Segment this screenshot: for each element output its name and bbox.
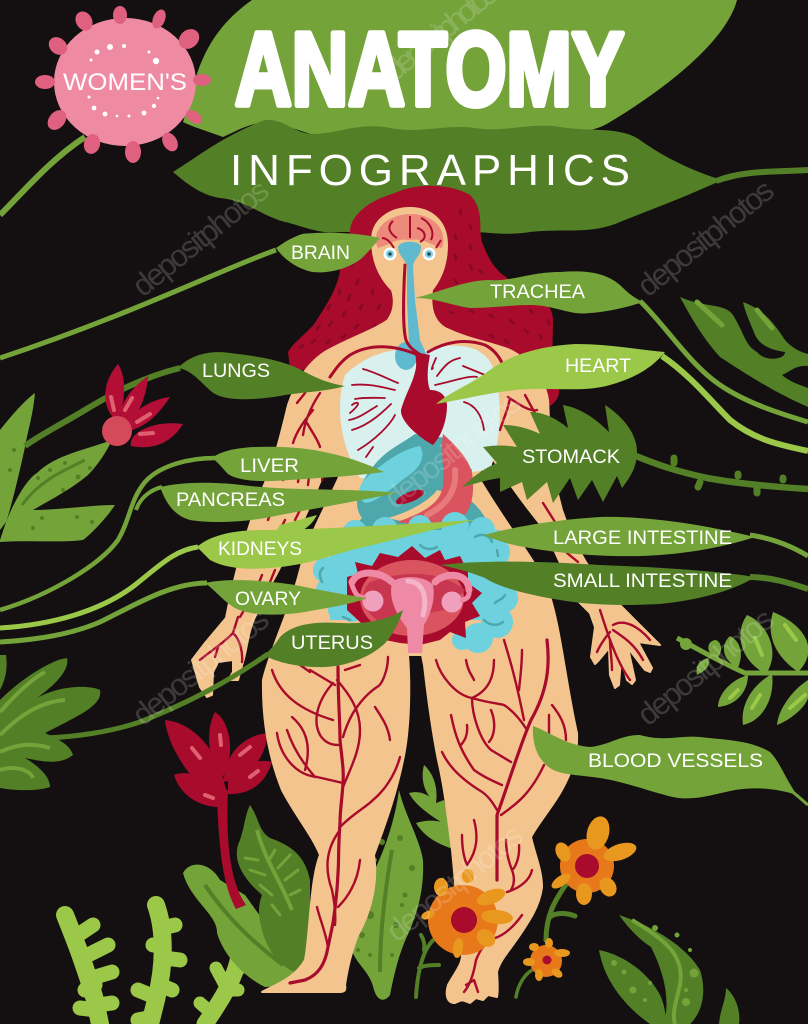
lungs: [340, 346, 500, 480]
watermark: depositphotos: [630, 601, 781, 732]
label leaf: kidneys: KIDNEYS: [218, 539, 302, 560]
plant: left spotted leaves: [0, 393, 115, 542]
watermark: depositphotos: [125, 172, 276, 303]
label leaf: brain: [0, 233, 380, 358]
badge: women's flower: [35, 6, 211, 163]
title: Anatomy: ANATOMY: [235, 12, 624, 128]
label leaf: small intestine: [440, 562, 808, 605]
watermark: [125, 0, 781, 948]
label leaf: blood vessels: [533, 726, 808, 805]
label leaf: liver: [0, 447, 384, 610]
body: [192, 208, 660, 1003]
hair: [288, 186, 559, 408]
label leaf: heart: [436, 344, 808, 451]
plant: mid-green leaf: [183, 865, 310, 987]
watermark: depositphotos: [379, 817, 530, 948]
label leaf: stomack: STOMACK: [522, 447, 620, 468]
flower: small orange with stem: [516, 938, 570, 997]
label leaf: small intestine: SMALL INTESTINE: [553, 571, 732, 592]
heart and arteries: [330, 265, 503, 457]
subtitle: Infographics: INFOGRAPHICS: [230, 146, 630, 195]
red flower: [102, 364, 183, 447]
plant: bottom right spotted leaves: [599, 915, 739, 1024]
label leaf: kidneys: [0, 515, 475, 628]
brain: [376, 214, 443, 248]
label leaf: trachea: TRACHEA: [490, 282, 585, 303]
plant: left bottom leaf: [0, 655, 100, 790]
flower: upper orange with stem: [546, 814, 639, 940]
subtitle leaf: [173, 120, 808, 234]
blood vessels: [200, 393, 650, 992]
plant: right fern: [677, 612, 808, 725]
watermark: depositphotos: [125, 601, 276, 732]
eyes: [384, 248, 436, 260]
label leaf: ovary: OVARY: [235, 589, 301, 610]
label leaf: pancreas: PANCREAS: [176, 490, 285, 511]
label leaf: large intestine: LARGE INTESTINE: [553, 528, 732, 549]
stem of the women's flower: [0, 137, 85, 215]
label leaf: trachea: [415, 271, 808, 422]
label leaf: large intestine: [484, 517, 808, 556]
flower: big orange with stem: [416, 869, 514, 997]
badge: women's flower: WOMEN'S: [63, 69, 187, 96]
label leaf: blood vessels: BLOOD VESSELS: [588, 751, 763, 772]
plant: spotted leaf behind the leg: [350, 790, 423, 1000]
plant: veined dark leaf: [205, 805, 310, 975]
label leaf: heart: HEART: [565, 356, 631, 377]
trachea: [395, 242, 428, 370]
plant: red sprout: [165, 712, 272, 909]
plant: fern right of the leg: [409, 765, 456, 850]
watermark: depositphotos: [630, 172, 781, 303]
label leaf: liver: LIVER: [240, 456, 299, 477]
label leaf: ovary: [0, 580, 367, 642]
organs: liver and stomach: [345, 434, 490, 540]
intestines: [313, 512, 518, 653]
label leaf: pancreas: [136, 483, 398, 522]
watermark: depositphotos: [377, 384, 528, 515]
label leaf: stomack: [462, 405, 808, 503]
label leaf: lungs: [25, 352, 345, 446]
label leaf: uterus: [45, 610, 403, 738]
label leaf: lungs: LUNGS: [202, 361, 270, 382]
pelvic cavity: [347, 546, 482, 645]
uterus: [391, 577, 434, 653]
title leaf: [183, 0, 737, 138]
plant: bottom left fronds: [65, 905, 248, 1024]
label leaf: brain: BRAIN: [291, 243, 350, 264]
label leaf: uterus: UTERUS: [291, 633, 373, 654]
plant: right top leaf: [680, 297, 808, 407]
